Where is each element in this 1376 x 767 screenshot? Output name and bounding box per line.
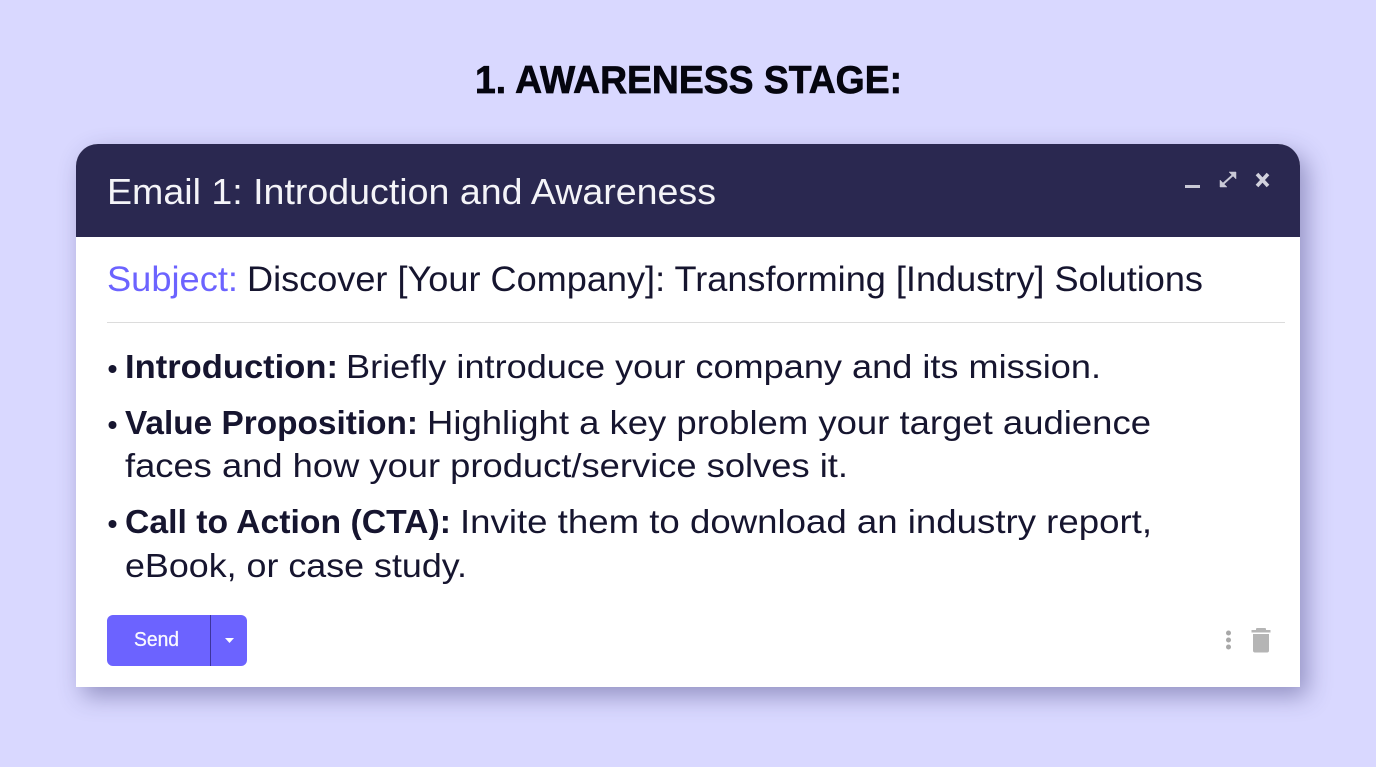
header bar (76, 144, 1300, 237)
send button: Send (134, 629, 179, 651)
bullet: call to action: Call to Action (CTA): (125, 503, 451, 540)
bullet: value proposition: Value Proposition: (125, 404, 418, 441)
bullet: value proposition (108, 404, 1151, 484)
bullet list (108, 348, 1152, 584)
bullet: call to action (108, 503, 1152, 584)
email card background (76, 144, 1300, 687)
icon: close (1257, 174, 1268, 186)
title: 1. AWARENESS STAGE: (475, 59, 902, 102)
bullet: call to action: eBook, or case study. (125, 547, 467, 584)
bullet: introduction (108, 348, 1101, 385)
icon: trash (1252, 628, 1270, 652)
bullet: value proposition: faces and how your product/service solves it. (125, 447, 848, 484)
header title: Email 1: Introduction and Awareness (107, 171, 716, 212)
bullet: value proposition: Highlight a key problem your target audience (427, 404, 1151, 441)
icon: more options (1226, 630, 1231, 650)
bullet: introduction: Briefly introduce your company and its mission. (346, 348, 1101, 385)
subject line: Discover [Your Company]: Transforming [Industry] Solutions (247, 260, 1203, 299)
panel: email window (76, 144, 1300, 666)
icon: minimize (1185, 185, 1200, 188)
bullet: introduction: Introduction: (125, 348, 338, 385)
icon: expand (1220, 172, 1236, 187)
send button (107, 615, 247, 666)
bullet: call to action: Invite them to download an industry report, (460, 503, 1152, 540)
icon: dropdown arrow (225, 638, 234, 643)
subject line: Subject: (107, 260, 238, 299)
